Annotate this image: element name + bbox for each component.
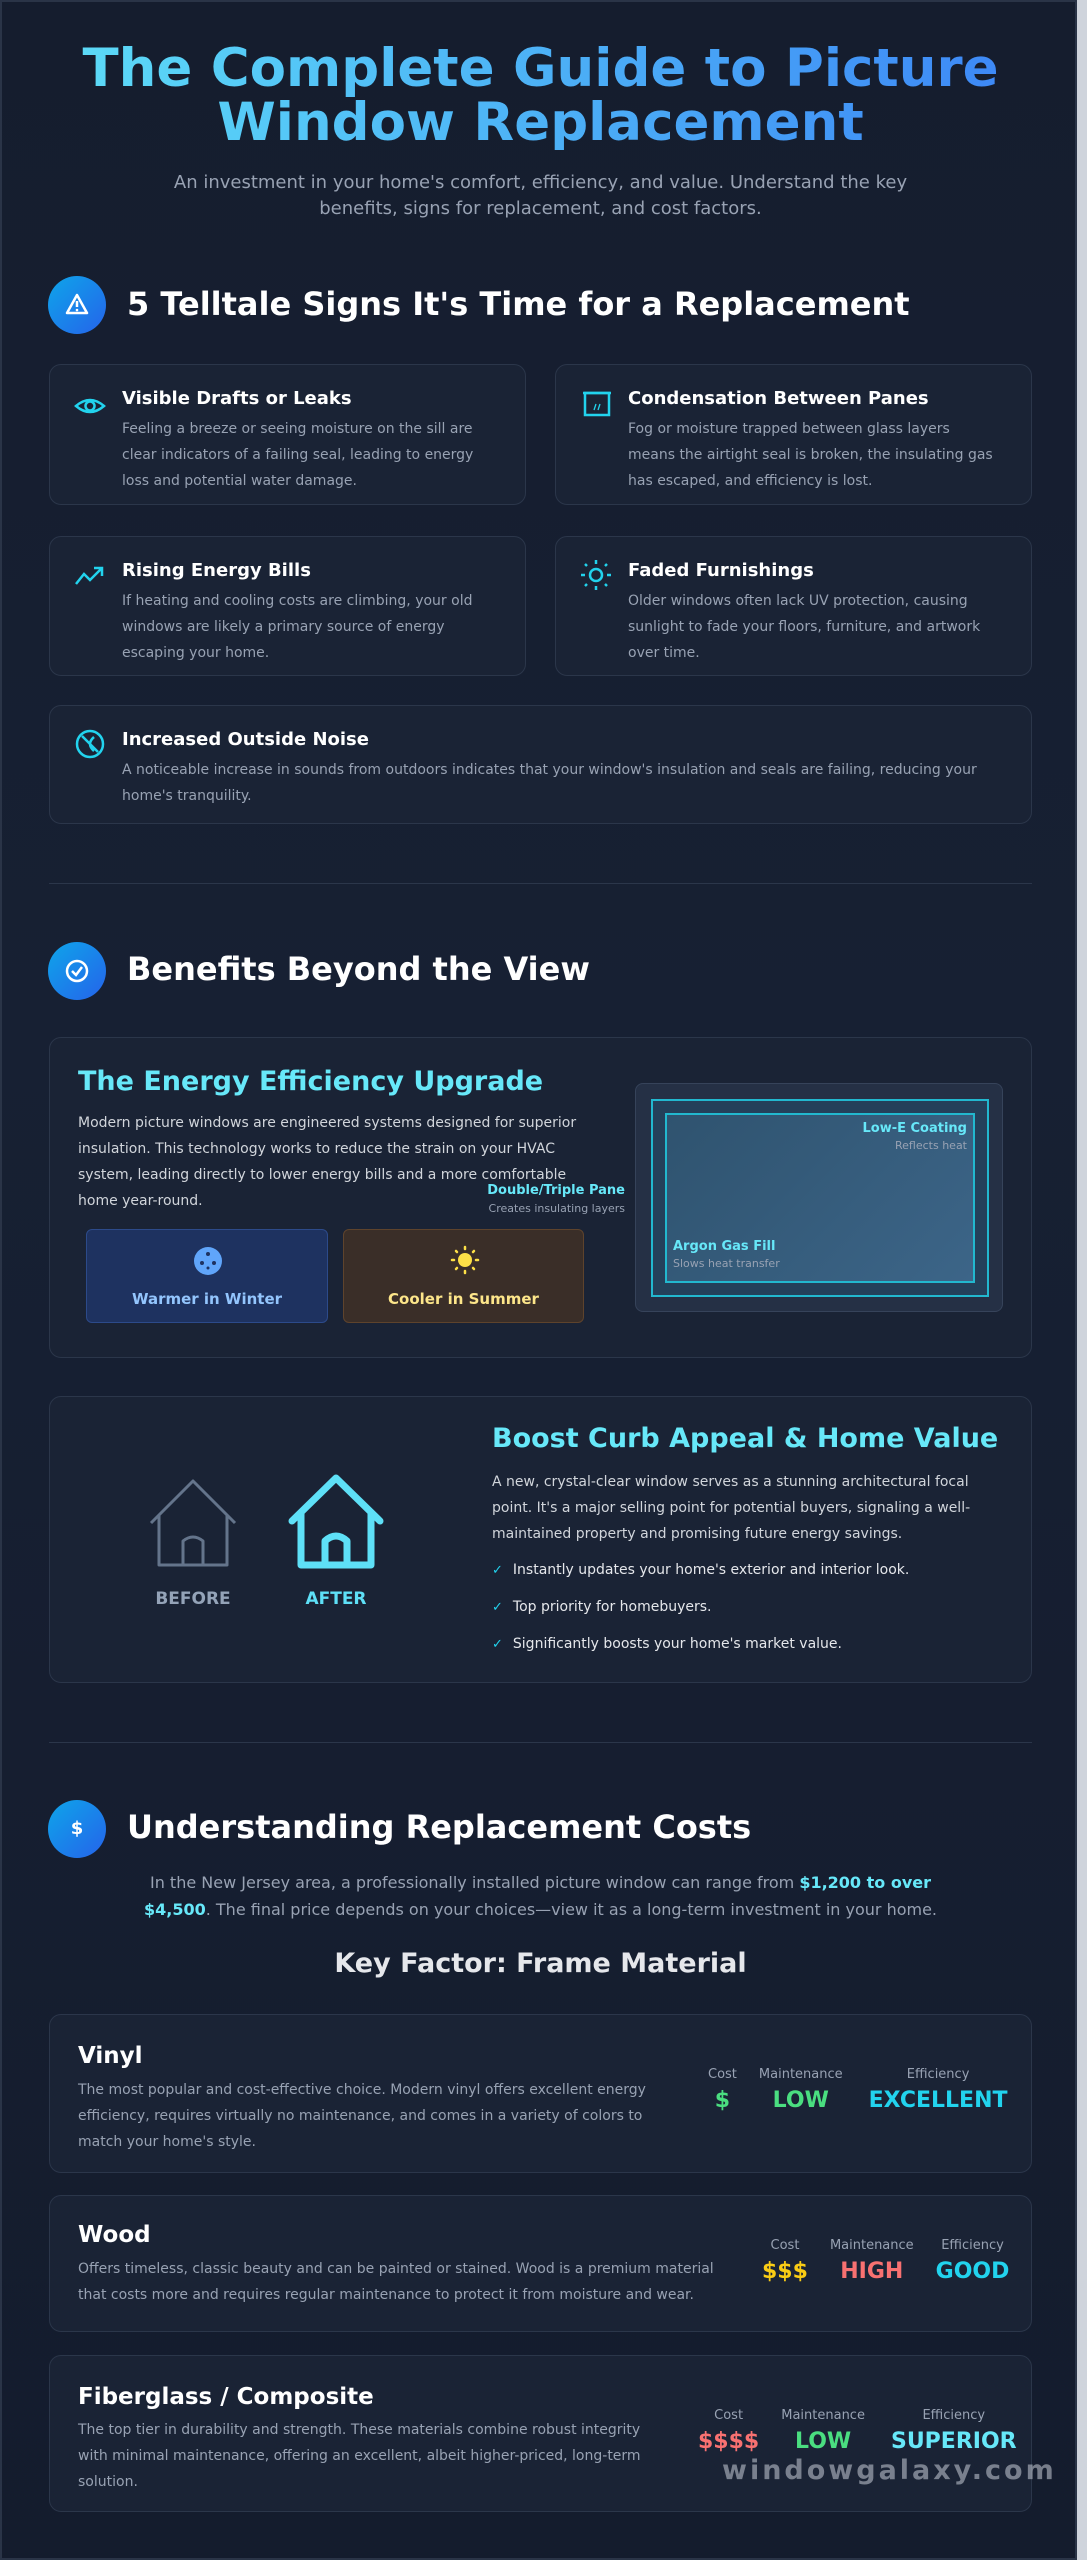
heading: signs: 5 Telltale Signs It's Time for a Replacement bbox=[127, 285, 910, 323]
label: double pane: Creates insulating layers bbox=[489, 1202, 625, 1215]
card: energy bills bbox=[49, 536, 526, 676]
heading: Boost Curb Appeal & Home Value bbox=[492, 1423, 998, 1454]
stats: Maintenance bbox=[759, 2067, 843, 2082]
title: Window Replacement bbox=[217, 92, 864, 153]
stats: HIGH bbox=[840, 2259, 903, 2284]
card: condensation: Fog or moisture trapped between glass layers means the airtight seal is broken, the insulating gas has escaped, and efficiency is lost. bbox=[628, 421, 993, 489]
stats: SUPERIOR bbox=[891, 2429, 1017, 2454]
badge: summer bbox=[343, 1229, 584, 1323]
text: Condensation Between Panes bbox=[628, 388, 929, 409]
stats: Maintenance bbox=[830, 2238, 914, 2253]
badge: winter bbox=[86, 1229, 328, 1323]
diagram: window bbox=[635, 1083, 1003, 1312]
stats: $$$ bbox=[762, 2259, 808, 2284]
icon: house before bbox=[150, 1479, 236, 1566]
stats: Efficiency bbox=[922, 2408, 985, 2423]
text: Increased Outside Noise bbox=[122, 729, 369, 750]
card: drafts: Feeling a breeze or seeing moisture on the sill are clear indicators of a failing seal, leading to energy loss and potential water damage. bbox=[122, 421, 473, 489]
stats: LOW bbox=[773, 2088, 829, 2113]
stats bbox=[698, 2408, 1017, 2454]
card: wood bbox=[49, 2195, 1032, 2332]
checklist: ✓ Significantly boosts your home's market value. bbox=[492, 1636, 842, 1652]
icon: trend up bbox=[75, 566, 104, 585]
icon: pane bbox=[583, 392, 611, 416]
stats: $$$$ bbox=[698, 2429, 759, 2454]
checklist: ✓ Top priority for homebuyers. bbox=[492, 1599, 712, 1615]
card: energy bills: If heating and cooling costs are climbing, your old windows are likely a primary source of energy escaping your home. bbox=[122, 593, 472, 661]
stats: Cost bbox=[714, 2408, 743, 2423]
card: vinyl bbox=[49, 2014, 1032, 2173]
card: wood: Wood bbox=[78, 2222, 151, 2248]
text: cost intro: In the New Jersey area, a professionally installed picture window can range from $1,200 to over $4,500. The final price depends on your choices—view it as a long-term investment in your home. bbox=[144, 1873, 937, 1919]
card: fiberglass bbox=[49, 2355, 1032, 2512]
badge: summer: Cooler in Summer bbox=[388, 1290, 539, 1308]
panel: curb appeal bbox=[49, 1396, 1032, 1683]
stats: Cost bbox=[708, 2067, 737, 2082]
card: noise: A noticeable increase in sounds from outdoors indicates that your window's insulation and seals are failing, reducing your home's tranquility. bbox=[122, 762, 977, 804]
icon: eye bbox=[74, 398, 106, 414]
stats bbox=[762, 2238, 1009, 2284]
title: The Complete Guide to Picture bbox=[82, 38, 999, 99]
icon: check bbox=[48, 942, 106, 1000]
diagram: window: Reflects heat bbox=[895, 1139, 967, 1152]
subtitle: An investment in your home's comfort, efficiency, and value. Understand the key benefits, signs for replacement, and cost factors. bbox=[174, 172, 907, 219]
card: wood: Offers timeless, classic beauty and can be painted or stained. Wood is a premium material that costs more and requires regular maintenance to protect it from moisture and wear. bbox=[78, 2261, 714, 2303]
stats bbox=[708, 2067, 1008, 2113]
text: Modern picture windows are engineered systems designed for superior insulation. This technology works to reduce the strain on your HVAC system, leading directly to lower energy bills and a more comfortable home year-round. bbox=[78, 1115, 576, 1209]
card: fiberglass: Fiberglass / Composite bbox=[78, 2384, 374, 2410]
stats: LOW bbox=[795, 2429, 851, 2454]
stats: Efficiency bbox=[941, 2238, 1004, 2253]
stats: Cost bbox=[771, 2238, 799, 2253]
heading: costs: Understanding Replacement Costs bbox=[127, 1808, 751, 1846]
label before: BEFORE bbox=[155, 1589, 231, 1609]
heading: frame material: Key Factor: Frame Material bbox=[334, 1948, 747, 1979]
icon: house after bbox=[288, 1474, 384, 1568]
icon: noise bbox=[76, 730, 104, 758]
text: A new, crystal-clear window serves as a stunning architectural focal point. It's a major selling point for potential buyers, signaling a well-maintained property and promising future energy savings. bbox=[492, 1474, 970, 1542]
text: Rising Energy Bills bbox=[122, 560, 311, 581]
stats: $ bbox=[715, 2088, 730, 2113]
diagram: window: Slows heat transfer bbox=[673, 1257, 780, 1270]
card: condensation bbox=[555, 364, 1032, 505]
diagram: window: Low-E Coating bbox=[862, 1121, 967, 1136]
stats: Maintenance bbox=[781, 2408, 865, 2423]
watermark: windowgalaxy.com bbox=[722, 2455, 1057, 2486]
panel: energy efficiency bbox=[49, 1037, 1032, 1358]
stats: EXCELLENT bbox=[869, 2088, 1008, 2113]
card: drafts bbox=[49, 364, 526, 505]
diagram: window: Argon Gas Fill bbox=[673, 1239, 775, 1254]
checklist bbox=[492, 1562, 909, 1652]
heading: The Energy Efficiency Upgrade bbox=[78, 1066, 543, 1097]
card: vinyl: Vinyl bbox=[78, 2043, 143, 2069]
label: double pane bbox=[487, 1183, 625, 1215]
card: fiberglass: The top tier in durability and strength. These materials combine robust integrity with minimal maintenance, offering an excellent, albeit higher-priced, long-term solution. bbox=[78, 2422, 641, 2490]
icon: dollar: $ bbox=[71, 1818, 83, 1839]
card: faded bbox=[555, 536, 1032, 676]
stats: GOOD bbox=[936, 2259, 1009, 2284]
label: double pane: Double/Triple Pane bbox=[487, 1183, 625, 1198]
icon: dollar bbox=[48, 1800, 106, 1858]
heading: benefits: Benefits Beyond the View bbox=[127, 950, 590, 988]
card: faded: Older windows often lack UV protection, causing sunlight to fade your floors, furniture, and artwork over time. bbox=[628, 593, 980, 661]
title bbox=[2, 42, 1079, 150]
text: Faded Furnishings bbox=[628, 560, 814, 581]
icon: warning bbox=[48, 276, 106, 334]
card: vinyl: The most popular and cost-effective choice. Modern vinyl offers excellent energy efficiency, requires virtually no maintenance, and comes in a variety of colors to match your home's style. bbox=[78, 2082, 646, 2150]
label after: AFTER bbox=[305, 1589, 367, 1609]
icon: sun bbox=[581, 560, 611, 590]
text: Visible Drafts or Leaks bbox=[122, 388, 352, 409]
checklist: ✓ Instantly updates your home's exterior and interior look. bbox=[492, 1562, 909, 1578]
badge: winter: Warmer in Winter bbox=[132, 1290, 282, 1308]
stats: Efficiency bbox=[907, 2067, 969, 2082]
card: noise bbox=[49, 705, 1032, 824]
